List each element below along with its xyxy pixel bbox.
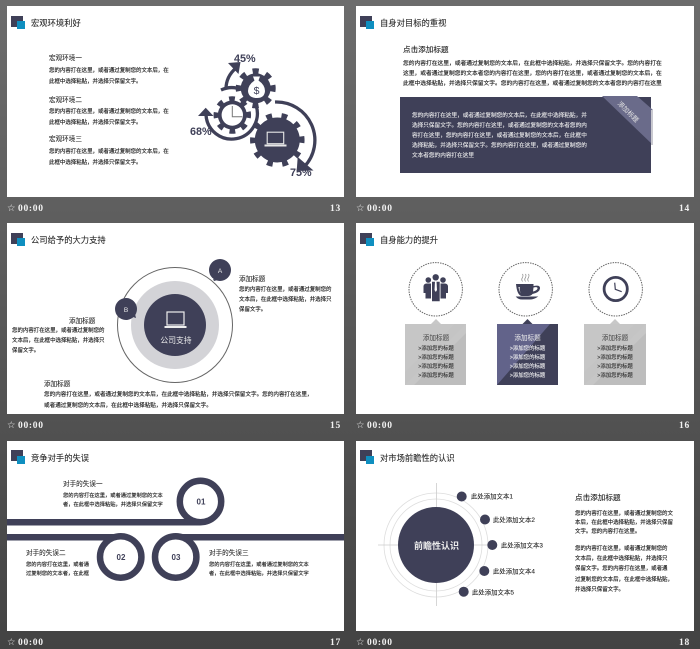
panel: slide 13 macro environment [7,6,344,197]
panel: slide 15 company support [7,223,344,414]
chart: gears with percentage arrows [190,53,315,179]
text block: mistake one [63,479,163,508]
text block: A: 添加标题 [239,274,266,283]
list item 2 [480,514,535,524]
title: 对市场前瞻性的认识 [380,453,455,463]
icon: laptop [164,312,186,328]
label: 45%: 45% [234,53,256,65]
text block: B: 添加标题 [69,316,96,325]
footer: slide 18: ☆ [356,637,365,648]
text block: B [12,316,105,354]
text block: A [239,274,332,313]
text block: environment one: 您的内容打在这里，或者通过复制您的文本后，在 [49,66,169,74]
text block: mistake two: 过复制您的文本者，在此框 [26,569,90,577]
icon: title squares [11,16,25,29]
text block: mistake two: 对手的失误二 [26,548,66,557]
callout text [412,111,587,159]
title: 宏观环境利好 [31,18,81,28]
card: right: >添加您的标题 [597,371,633,379]
list item 2: 此处添加文本2 [493,515,535,524]
footer: slide 15: ☆ [7,420,16,431]
footer: slide 15: 00:00 [18,421,44,431]
label: 75%: 75% [290,167,312,179]
text block: environment three [49,134,169,166]
callout text: 选择粘贴，并选择只保留文字。您的内容打在这里，或者通过复制您的 [412,141,587,149]
text block: right column: 过复制您的文本后，在此框中选择粘贴， [575,575,673,583]
text block: environment three: 您的内容打在这里，或者通过复制您的文本后，在 [49,147,169,155]
text block: right column: 并选择只保留文字。 [575,585,624,593]
text block: B: 您的内容打在这里，或者通过复制您的 [12,326,105,334]
text block: right column: 您的内容打在这里，或者通过复制您的 [575,544,668,552]
panel: slide 16 abilities [356,223,694,414]
ribbon [602,96,653,145]
diagram: band with 02 ring: 02 [117,553,126,562]
diagram: concentric circles [115,259,232,382]
list item 1: 此处添加文本1 [471,492,513,500]
footer: slide 14: ☆ [356,203,365,214]
card: right: >添加您的标题 [597,344,633,352]
diagram: band with 03 ring: 03 [172,553,181,562]
icon: laptop gear [252,114,303,166]
card: left [405,319,466,385]
card: right: 添加标题 [602,333,629,342]
icon: pie chart gear [216,99,248,131]
text block: intro: 这里，或者通过复制您的文本者您的内容打在这里，您的内容打在这里，或者通过复制您的文本后，在 [403,69,662,77]
bubble B: B [124,307,128,314]
list item 4: 此处添加文本4 [493,566,535,576]
text block: right column: 您的内容打在这里，或者通过复制您的文 [575,509,673,517]
text block: mistake two [26,548,90,577]
icon: team in dashed circle [409,263,462,316]
card: centre: >添加您的标题 [510,344,546,352]
card: right [584,319,646,385]
icon: title squares [11,450,25,464]
callout text: 您的内容打在这里，或者通过复制您的文本后，在此框中选择粘贴，并 [412,111,587,119]
title: 自身对目标的重视 [380,18,446,28]
card: left: >添加您的标题 [418,344,454,352]
diagram: band with 01 ring: 01 [197,498,206,506]
bubble A: A [218,268,223,275]
footer: slide 13 [7,203,341,214]
title: 自身能力的提升 [380,235,438,245]
panel: slide 17 competitor mistakes [7,441,344,631]
label: company support: 公司支持 [160,335,192,345]
text block: environment two: 此框中选择粘贴，并选择只保留文字。 [49,118,141,126]
ribbon: 添加标题 [616,99,641,124]
callout text: 文本者您的内容打在这里 [412,151,474,159]
diagram: foresight circle: 前瞻性认识 [414,540,459,551]
text block: environment two: 您的内容打在这里，或者通过复制您的文本后，在 [49,107,169,115]
text block: environment two: 宏观环境二 [49,95,82,104]
footer: slide 17: 00:00 [18,638,44,648]
footer: slide 15: 15 [330,421,341,431]
text block: mistake three: 者，在此框中选择粘贴，并选择只保留文字 [209,569,309,577]
icon: title squares [360,233,374,246]
text block: mistake three [209,548,309,577]
footer: slide 18: 00:00 [367,638,393,648]
card: centre: >添加您的标题 [510,362,546,370]
text block: mistake one: 者，在此框中选择粘贴，并选择只保留文字 [63,500,163,508]
card: right: >添加您的标题 [597,353,633,361]
title: 竞争对手的失误 [31,453,90,463]
card: centre: >添加您的标题 [510,353,546,361]
text block: mistake two: 您的内容打在这里，或者通 [26,560,90,568]
text block: right column: 文本后，在此框中选择粘贴，并选择只 [575,554,668,562]
text block: A: 文本后，在此框中选择粘贴，并选择只 [239,295,332,303]
card: left: >添加您的标题 [418,362,454,370]
footer: slide 16: ☆ [356,420,365,431]
footer: slide 17: 17 [330,638,341,648]
footer: slide 16 [356,420,690,431]
text block: intro: 您的内容打在这里，或者通过复制您的文本后，在此框中选择粘贴，并选择只保留文字。您的内容打在 [403,59,662,67]
diagram: band with 01 ring [7,481,221,526]
footer: slide 13: 13 [330,204,341,214]
text block: B: 保留文字。 [12,346,39,354]
text block: B: 文本后，在此框中选择粘贴，并选择只 [12,336,105,344]
card: left: >添加您的标题 [418,353,454,361]
footer: slide 14: 00:00 [367,204,393,214]
text block: mistake three: 对手的失误三 [209,548,249,557]
text block: right column: 点击添加标题 [575,492,621,502]
icon: title squares [360,16,374,29]
card: centre: 添加标题 [514,333,541,342]
footer: slide 14 [356,203,690,214]
footer: slide 15 [7,420,341,431]
text block: mistake one: 您的内容打在这里，或者通过复制您的文本 [63,491,163,499]
list item 5: 此处添加文本5 [472,588,514,596]
diagram: band with 02 ring [7,534,141,578]
text block: intro: 点击添加标题 [403,44,449,54]
footer: slide 18 [356,637,690,648]
card: right: >添加您的标题 [597,362,633,370]
diagram: band with 03 ring [155,534,344,578]
label: 68%: 68% [190,126,212,138]
text block: mistake three: 您的内容打在这里，或者通过复制您的文本 [209,560,309,568]
icon: clock in dashed circle [589,263,642,316]
callout text: 选择只保留文字。您的内容打在这里，或者通过复制您的文本者您的内 [412,121,587,129]
text block: right column: 文字。您的内容打在这里。 [575,527,640,535]
text block: environment three: 此框中选择粘贴，并选择只保留文字。 [49,158,141,166]
card: left: 添加标题 [423,333,450,342]
text block: environment one [49,53,169,85]
list item 1 [457,492,513,502]
diagram: foresight circle [378,483,488,606]
text block: intro [403,44,662,87]
icon: coffee cup in dashed circle [499,263,552,316]
footer: slide 17: ☆ [7,637,16,648]
text block: environment three: 宏观环境三 [49,134,82,143]
arrow: 75 percent [275,102,315,171]
footer: slide 14: 14 [679,204,690,214]
text block: right column: 本后，在此框中选择粘贴，并选择只保留 [575,518,673,526]
footer: slide 16: 16 [679,421,690,431]
callout text: 容打在这里，您的内容打在这里，或者通过复制您的文本后，在此框中 [412,131,587,139]
arrow: 68 percent [198,88,257,139]
text block: right column [575,492,673,593]
footer: slide 18: 18 [679,638,690,648]
text block: environment two [49,95,169,126]
footer: slide 13: ☆ [7,203,16,214]
title: 公司给予的大力支持 [31,235,106,245]
panel: slide 18 market foresight [356,441,694,631]
text block: intro: 此框中选择粘贴，并选择只保留文字。您的内容打在这里，或者通过复制您的文本者您的内容打在这里 [403,79,662,87]
list item 4 [479,566,535,576]
card: centre [497,319,558,385]
icon: title squares [360,450,374,464]
text block: right column: 保留文字。您的内容打在这里，或者通 [575,564,668,572]
list item 3 [487,540,543,550]
text block: environment one: 此框中选择粘贴，并选择只保留文字。 [49,77,141,85]
text block: bottom [44,379,313,409]
text block: environment one: 宏观环境一 [49,53,82,62]
callout: dark box [400,96,653,173]
text block: bottom: 或者通过复制您的文本后，在此框中选择粘贴，并选择只保留文字。 [44,401,212,409]
text block: bottom: 添加标题 [44,379,71,388]
icon: dollar gear: $ [254,85,260,97]
footer: slide 13: 00:00 [18,204,44,214]
card: left: >添加您的标题 [418,371,454,379]
footer: slide 16: 00:00 [367,421,393,431]
list item 3: 此处添加文本3 [501,540,543,550]
list item 5 [459,587,514,597]
card: centre: >添加您的标题 [510,371,546,379]
text block: A: 保留文字。 [239,305,266,313]
icon: title squares [11,233,25,246]
arrow: 45 percent [226,62,240,89]
footer: slide 17 [7,637,341,648]
text block: A: 您的内容打在这里，或者通过复制您的 [239,285,332,293]
panel: slide 14 goals [356,6,694,197]
text block: bottom: 您的内容打在这里，或者通过复制您的文本后，在此框中选择粘贴，并选择只保留文字。您的内容打在这里， [44,390,313,398]
text block: mistake one: 对手的失误一 [63,479,103,488]
